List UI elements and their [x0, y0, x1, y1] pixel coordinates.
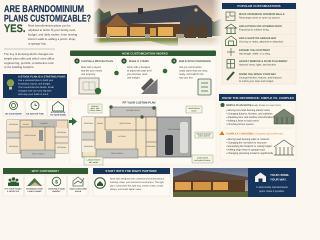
icon: partner seal: [95, 178, 105, 188]
customization list: Rearrange rooms or open up spaces.: [239, 16, 281, 20]
floor plan: customized: BEDROOM: [84, 122, 93, 125]
callouts on plan: ADDED SHOP: [197, 156, 209, 160]
floor plan: customized: SHOP GARAGE: [168, 128, 181, 131]
key paragraph: The key is knowing which changes are: [4, 52, 54, 56]
complex changes: (Affect Engineering/Cost/Permits): [249, 132, 283, 136]
callouts on plan: BIGGER GARAGE: [197, 132, 212, 136]
callout: stock plan starting point: [3, 74, 67, 98]
why customize labels: BUDGET: [53, 190, 61, 193]
benefit icons row: A CLEAR PATH: [51, 111, 66, 114]
panel: know the difference: [219, 93, 296, 160]
heading: popular customizations: POPULAR CUSTOMIZATIONS: [237, 4, 281, 8]
step 2: Work with a designer: [127, 66, 150, 69]
panel: popular customizations: [222, 3, 296, 84]
icon: light bulb: [7, 79, 14, 90]
step 1: Start with a layout: [81, 66, 101, 69]
panel: customized plan: [70, 99, 216, 165]
callout: stock plan starting point: changes now can save big later: [18, 90, 52, 92]
callout: stock plan starting point: foundation, layout, and budget.: [18, 82, 51, 86]
why customize labels: FITS YOUR FAMILY: [4, 188, 22, 190]
customization list: Add length, width, or a wing.: [239, 52, 271, 56]
why customize labels: LAND & VIEWS: [28, 190, 42, 193]
heading: how customization works: HOW CUSTOMIZATION WORKS: [122, 52, 168, 56]
icon: family: [8, 177, 19, 186]
callout: stock plan starting point: A STOCK PLAN IS A STARTING POINT.: [18, 76, 66, 78]
simple plan edits: • Changing fixtures, finishes, and cabinets: [226, 112, 273, 116]
floor plan: original stock plan: GARAGE: [40, 122, 48, 125]
complex changes: • Moving load-bearing walls or columns: [226, 138, 270, 141]
floor plan: customized: COVERED PATIO: [126, 109, 140, 112]
step 2: [121, 58, 152, 80]
callouts on plan: BAY AND STORAGE: [194, 159, 211, 162]
panel: how customization works: [70, 50, 216, 97]
icon: interior walls: [226, 12, 235, 20]
partner text: plan, customized the right way, saves money, avoids: [110, 184, 164, 188]
panel: why customize: [3, 168, 88, 196]
complex changes: COMPLEX CHANGES: [226, 132, 252, 136]
customization list: ADD A PORCH OR COVERED PATIO: [239, 25, 282, 28]
partner text: building codes, and real-world construction. The right: [110, 181, 164, 184]
step connectors: [114, 65, 167, 75]
floor plan: customized: DINING: [97, 122, 104, 125]
simple plan edits: • Adjusting door and window sizes/locations: [226, 116, 275, 119]
customization list: Change finishes, fixtures, and features: [239, 76, 282, 80]
simple plan edits: • Finishing bonus spaces: [226, 123, 254, 126]
floor plan: original stock plan: BEDROOM: [57, 146, 66, 149]
step 2: and budget.: [127, 76, 141, 80]
intro paragraph: adjusted to better fit your family, land,: [28, 28, 76, 32]
key paragraph: [4, 49, 55, 69]
step 1: CHOOSE A PROVEN PLAN: [81, 60, 113, 63]
step 1: [74, 58, 113, 76]
icon: house: [255, 172, 266, 182]
callouts on plan: [84, 104, 213, 165]
step 2: your lifestyle, land,: [127, 73, 148, 76]
step 3: BUILD WITH CONFIDENCE: [179, 60, 211, 63]
simple plan edits: [220, 103, 281, 126]
customization list: FINISH THE SPACE YOUR WAY: [239, 73, 276, 76]
callouts on plan: FOR YOUR RV: [198, 135, 211, 138]
heading: start with the right partner: START WITH THE RIGHT PARTNER: [105, 169, 157, 173]
heading: why customize: WHY CUSTOMIZE?: [32, 169, 59, 173]
callouts on plan: ADDED BACK: [188, 107, 200, 110]
customization list: One bay or many, attached or detached.: [239, 40, 284, 44]
key paragraph: simple plan edits and which ones affect: [4, 56, 54, 60]
callouts on plan: OPEN LIVING: [90, 109, 101, 112]
customization list: ADD A SHOP OR GARAGE BAY: [239, 37, 277, 40]
icon: checklist: [198, 79, 211, 95]
icon: land: [27, 178, 42, 186]
partner text: delays, and builds better value.: [110, 188, 142, 191]
intro paragraph: or garage bay.: [28, 41, 47, 45]
benefit icons row: NO GUESSWORK: [5, 112, 22, 116]
step 3: ready plans that are clear,: [179, 70, 208, 72]
benefit icons row: NO WASTED TIME: [26, 112, 44, 116]
step 1: that fits your needs: [81, 70, 103, 72]
heading: how customization works: [70, 50, 216, 56]
complex changes: • Adding large shop or garage bays: [226, 148, 266, 152]
icon: house simple: [274, 109, 294, 124]
floor plan: original stock plan: FRONT PORCH: [32, 152, 45, 156]
floor plan: original stock plan: BEDROOM: [57, 131, 66, 134]
customization list: EXPAND THE FOOTPRINT: [239, 49, 271, 52]
icon: value: [73, 177, 84, 186]
intro paragraph: [28, 24, 78, 45]
callout: stock plan starting point: and keep your build on track.: [18, 93, 49, 96]
step 3: [171, 58, 211, 80]
why customize labels: [4, 188, 87, 193]
customization list: ADJUST WINDOW & DOOR PLACEMENT: [239, 60, 288, 63]
floor plan: customized: KITCHEN: [118, 135, 126, 138]
why customize labels: VALUE: [75, 190, 82, 193]
panel: your home your way: [248, 168, 296, 197]
panel: your home your way: plans made it possible.: [259, 190, 285, 193]
hero image: barndominium: [93, 0, 222, 47]
title: [4, 4, 91, 24]
icon: pencil and ruler: [141, 78, 158, 94]
floor plan: original stock plan: GREAT ROOM: [24, 134, 36, 137]
simple plan edits: (Usually Easier & Lower Cost): [250, 104, 281, 107]
customization list: MOVE OR REMOVE INTERIOR WALLS: [239, 13, 285, 16]
callout: stock plan starting point: Use a reviewed plan to build your: [18, 79, 54, 82]
step 3: way you live.: [179, 76, 194, 80]
floor plan: original stock plan: BEDROOM: [9, 123, 18, 126]
label: fit your custom plan: FIT YOUR CUSTOM PLAN: [123, 102, 156, 104]
photo: finished barndominium at dusk: [173, 168, 248, 197]
floor plan: original stock plan: DINING: [23, 123, 30, 126]
benefit icons row: [3, 100, 68, 116]
step 3: 3: [173, 59, 175, 63]
partner text: [110, 178, 165, 191]
callouts on plan: AND VIEWS: [89, 161, 99, 164]
floor plan: original stock plan: [7, 120, 68, 158]
floor plan: original stock plan: BEDROOM: [9, 145, 18, 148]
intro paragraph: interior walls to adding a porch, shop,: [28, 37, 76, 41]
title: ARE BARNDOMINIUM: [4, 4, 84, 15]
panel: your home your way: YOUR WAY.: [270, 178, 287, 182]
why customize labels: MAXIMIZES YOUR: [26, 188, 43, 190]
icon: house framing: [274, 140, 294, 155]
panel: start with the right partner: [93, 168, 170, 196]
customization list: Expand your outdoor living.: [239, 28, 270, 32]
partner text: Work with designers who understand barndominiums,: [110, 178, 165, 180]
icon: paint brush: [227, 72, 234, 80]
step 2: MAKE IT YOURS: [129, 60, 149, 63]
floor plan: customized: FRONT PORCH: [111, 152, 124, 155]
customization list: [239, 13, 288, 83]
complex changes: • Changing the roof pitch or structure: [226, 142, 267, 144]
intro paragraph: Most barndominium plans can be: [28, 24, 71, 28]
simple plan edits: • Adding a front or back porch: [226, 120, 259, 122]
panel: your home your way: YOUR HOME.: [270, 173, 290, 177]
why customize labels: ADDS LONG-TERM: [69, 188, 87, 190]
step 3: ready, and built for the: [179, 73, 204, 76]
floor plan: customized: BEDROOM: [147, 145, 156, 148]
callouts on plan: REMOVE: [91, 105, 100, 108]
complex changes: [220, 131, 283, 155]
panel: your home your way: Customizable barndominium: [256, 186, 288, 189]
icon: window: [227, 60, 234, 68]
complex changes: • Changing plumbing locations significantly: [226, 152, 274, 155]
intro paragraph: budget, and daily routine, from moving: [28, 32, 78, 36]
why customize labels: & LIFESTYLE: [7, 190, 20, 193]
floor plan: customized: GREAT ROOM: [119, 122, 131, 125]
icon: porch: [226, 24, 236, 34]
floor plan: customized: BEDROOM: [84, 145, 93, 148]
callouts on plan: PATIO: [192, 110, 197, 112]
callout: stock plan starting point: Then customize the details. Small: [18, 86, 54, 89]
icon: footprint: [227, 48, 235, 56]
arrow: [69, 118, 77, 126]
step 1: 1: [76, 59, 78, 63]
complex changes: • Expanding the footprint or ceiling height: [226, 145, 272, 148]
key paragraph: engineering, permits, construction cost,: [4, 61, 54, 65]
simple plan edits: • Moving non-load-bearing interior walls: [226, 109, 271, 112]
customization list: Improve views, light, and function.: [239, 64, 277, 66]
benefit icons row: TO YOUR HOME: [50, 113, 66, 116]
step 3: Get pre-construction: [179, 66, 202, 69]
callouts on plan: LARGER PORCH: [87, 158, 101, 162]
customization list: to match your style and budget.: [239, 80, 274, 83]
icon: budget: $: [55, 179, 58, 185]
step 2: to adjust the plan to fit: [127, 70, 152, 72]
callouts on plan: WALL FOR: [91, 107, 100, 110]
yes answer: YES.: [4, 23, 26, 35]
key paragraph: or the building footprint.: [4, 65, 34, 69]
step 1: and property.: [81, 73, 96, 76]
icon: shop: [226, 36, 236, 46]
simple plan edits: SIMPLE PLAN EDITS: [226, 104, 251, 107]
why customize labels: CONTROLS YOUR: [48, 188, 65, 190]
floor plan: customized: [82, 105, 191, 158]
heading: know the difference: KNOW THE DIFFERENCE: SIMPLE VS. COMPLEX: [222, 96, 294, 100]
title: PLANS CUSTOMIZABLE?: [4, 14, 91, 24]
step 2: 2: [123, 59, 125, 63]
icon: blueprint with check: [79, 78, 101, 94]
